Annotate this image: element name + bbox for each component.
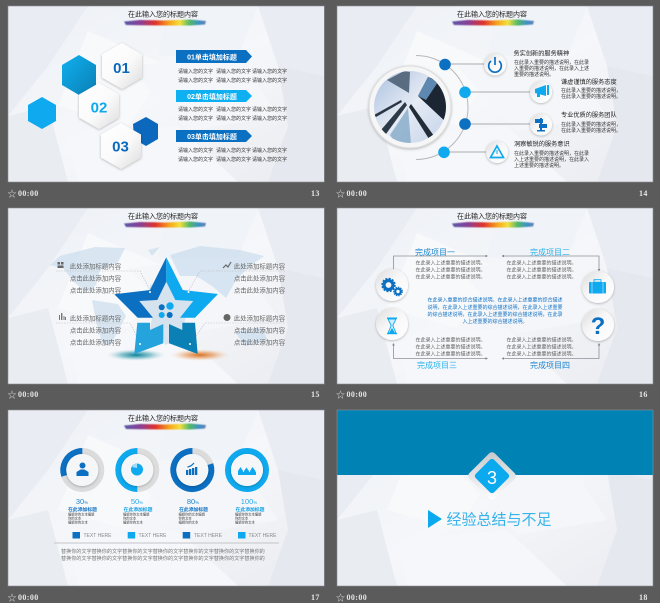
summary text (61, 548, 265, 562)
footer 15: 15 (311, 390, 320, 399)
icon: grid (58, 262, 64, 268)
text block: bottom left: 点击此处添加内容 (70, 338, 122, 346)
description text: top: 在此录入上述重要的描述说明。 (416, 274, 486, 280)
item 01: 请输入您的文字 (252, 68, 287, 75)
text block: bottom right: 点击此处添加内容 (234, 338, 286, 346)
stats column 2: 50% (131, 497, 143, 506)
footer 16: 00:00 (346, 390, 367, 399)
text block 2: 谦虚谨慎的服务态度 (561, 78, 617, 86)
stats column 4: 你的文本 (235, 516, 249, 520)
text block: top left: 此处添加标题内容 (70, 262, 122, 270)
text block: top right: 点击此处添加内容 (234, 274, 286, 282)
hexagon 03 (101, 123, 141, 169)
star shadows (106, 349, 230, 361)
bracket connectors (394, 256, 599, 358)
text block: bottom left: 此处添加标题内容 (70, 314, 122, 322)
text block: top right: 此处添加标题内容 (234, 262, 286, 270)
footer 17: 17 (311, 593, 320, 602)
item 02: 请输入您的文字 (252, 115, 287, 122)
text block: bottom left: 点击此处添加内容 (70, 326, 122, 334)
divider (54, 542, 279, 544)
footer 17: ☆ (8, 593, 17, 603)
world map (50, 246, 268, 346)
item 01: 01单击填加标题 (187, 52, 237, 62)
footer 13: 13 (311, 189, 320, 198)
item 01: 请输入您的文字 (252, 77, 287, 84)
item 01: 请输入您的文字 (178, 77, 213, 84)
legend: TEXT HERE (248, 533, 277, 539)
item 01: 请输入您的文字 (216, 68, 251, 75)
text block: top left (70, 262, 122, 294)
star (114, 257, 218, 354)
legend: TEXT HERE (138, 533, 167, 539)
icon: question mark (582, 309, 614, 341)
stats column 2: 在此添加标题 (124, 506, 153, 513)
text block 4: 入上述重要的描述说明，在此录入 (514, 156, 589, 163)
title: 在此输入您的标题内容 (457, 212, 527, 220)
text block 1: 重要的描述说明。 (514, 71, 554, 78)
photo circle (369, 66, 451, 148)
footer 17 (8, 593, 320, 603)
stats column 3: 80% (187, 497, 199, 506)
footer 13 (8, 189, 320, 199)
text block 4: 在此录入重要的描述说明，在此录 (514, 150, 589, 157)
project headings: 完成项目三 (417, 360, 457, 370)
text block 1: 在此录入重要的描述说明，在此录 (514, 59, 589, 66)
title: 在此输入您的标题内容 (128, 212, 198, 220)
text block 2: 在此录入重要的描述说明， (561, 87, 621, 94)
item 03: 03单击填加标题 (187, 132, 237, 141)
footer 14 (336, 189, 648, 199)
stats column 1: 你的文本 (68, 516, 82, 520)
central blue text: 在此录入重要的综合描述说明。在此录入上述重要的综合描述 (427, 296, 563, 304)
connector dots (438, 59, 471, 158)
footer 18: 18 (639, 593, 648, 602)
item 03: 请输入您的文字 (178, 156, 213, 163)
description text: top: 在此录入上述重要的描述说明。 (416, 266, 486, 274)
footer 18: ☆ (336, 593, 345, 603)
text block 4 (514, 140, 589, 169)
item 03: 请输入您的文字 (216, 147, 251, 154)
project headings (415, 247, 570, 370)
stats column 4: 100% (241, 497, 257, 506)
footer 13: 00:00 (18, 189, 39, 198)
legend: TEXT HERE (84, 533, 112, 539)
connector lines (444, 64, 532, 152)
arc (416, 56, 468, 160)
stats column 1 (68, 497, 97, 524)
brush stroke (124, 222, 206, 228)
diamond badge: 3 (487, 468, 497, 488)
stats column 4 (235, 497, 265, 524)
stats column 2: 编辑你的文本编辑 (123, 512, 150, 516)
icon: trend (223, 262, 231, 268)
footer 16: ☆ (336, 390, 345, 400)
stats column 1: 编辑你的文本 (68, 520, 88, 524)
icon: power (484, 54, 506, 76)
stats column 3: 编辑你的文本编辑 (178, 512, 206, 516)
text block: bottom left (70, 314, 122, 346)
central blue text: 入上述重要的综合描述说明。 (462, 318, 528, 325)
stats column 1: 在此添加标题 (68, 506, 97, 513)
panel: slide 16 four projects (337, 208, 653, 384)
description text: bottom: 在此录入上述重要的描述说明。 (416, 344, 486, 350)
ring 30% (58, 446, 106, 494)
description text: top: 在此录入上述重要的描述说明。 (506, 260, 577, 266)
triangle marker (428, 510, 442, 528)
text block 3 (561, 111, 621, 134)
central blue text (427, 296, 563, 325)
panel: slide 17 progress rings (8, 410, 324, 586)
footer 15: ☆ (8, 390, 17, 400)
text block 4: 上述重要的描述说明。 (514, 162, 564, 169)
item 03: 请输入您的文字 (252, 147, 287, 154)
arrowheads (392, 255, 600, 360)
item 03 (176, 130, 287, 163)
text block: top right (234, 262, 286, 294)
footer 14: 14 (639, 189, 648, 198)
diamond badge (467, 451, 517, 501)
text block: bottom right (234, 314, 286, 346)
footer 14: 00:00 (346, 189, 367, 198)
icon: warning (486, 141, 508, 163)
project headings: 完成项目二 (530, 247, 570, 257)
stats column 3 (178, 497, 208, 524)
brush stroke (452, 222, 534, 228)
panel: slide 14 service circle (337, 6, 653, 182)
item 03: 请输入您的文字 (252, 156, 287, 163)
item 02: 请输入您的文字 (178, 115, 213, 122)
footer 14: ☆ (336, 189, 345, 199)
footer 16 (336, 390, 648, 400)
footer 15: 00:00 (18, 390, 39, 399)
item 02: 请输入您的文字 (216, 115, 251, 122)
description text: top (416, 260, 577, 280)
description text: top: 在此录入上述重要的描述说明。 (506, 274, 577, 280)
stats column 2: 编辑你的文本 (123, 520, 143, 524)
stats column 3: 编辑你的文本 (178, 520, 199, 524)
ring 100% (228, 451, 266, 489)
icon: hourglass (376, 308, 408, 340)
brush stroke (452, 20, 534, 26)
description text: top: 在此录入上述重要的描述说明。 (416, 260, 486, 266)
hexagon 01 (102, 43, 142, 89)
dashed leader lines (56, 271, 285, 345)
description text: top: 在此录入上述重要的描述说明。 (506, 266, 577, 274)
text block: bottom right: 点击此处添加内容 (234, 326, 286, 334)
item 02: 请输入您的文字 (178, 106, 213, 113)
text block 2 (561, 78, 621, 100)
legend: TEXT HERE (194, 533, 223, 539)
footer 18 (336, 593, 648, 603)
footer 15 (8, 390, 320, 400)
icon: bars (59, 313, 66, 320)
item 03: 请输入您的文字 (178, 147, 213, 154)
icon: signpost (530, 114, 552, 136)
stats column 4: 编辑你的文本 (235, 520, 255, 524)
brush stroke (124, 20, 206, 26)
icon: question mark: ? (591, 313, 605, 340)
icon: pie (224, 314, 230, 321)
item 03: 请输入您的文字 (216, 156, 251, 163)
title: 在此输入您的标题内容 (128, 414, 198, 422)
legend (72, 532, 277, 539)
footer 13: ☆ (8, 189, 17, 199)
stats column 3: 你的文本 (178, 516, 192, 520)
icon: megaphone (530, 81, 552, 103)
summary text: 替换你的文字替换你的文字替换你的文字替换你的文字替换你的文字替换你的文字替换你的 (61, 555, 265, 562)
item 02: 02单击填加标题 (187, 92, 237, 101)
item 02: 请输入您的文字 (216, 106, 251, 113)
item 02: 请输入您的文字 (252, 106, 287, 113)
hexagon: dark blue (133, 117, 158, 146)
text block: top left: 点击此处添加内容 (70, 286, 122, 294)
project headings: 完成项目一 (415, 247, 455, 257)
stats column 3: 在此添加标题 (179, 506, 208, 513)
footer 17: 00:00 (18, 593, 39, 602)
blue header band (337, 410, 653, 475)
text block 1: 务实创新的服务精神 (514, 50, 569, 58)
description text: bottom: 在此录入上述重要的描述说明。 (506, 344, 577, 350)
stats column 2 (123, 497, 153, 524)
text block 3: 在此录入重要的描述说明。 (561, 127, 621, 134)
hexagon 02: 02 (91, 100, 107, 116)
stats column 2: 你的文本 (123, 516, 137, 520)
item 02 (176, 90, 287, 122)
text block 4: 洞察敏锐的服务意识 (514, 140, 570, 148)
text block 1 (514, 50, 589, 78)
description text: bottom: 在此录入上述重要的描述说明。 (416, 336, 486, 344)
item 01: 请输入您的文字 (216, 77, 251, 84)
footer 18: 00:00 (346, 593, 367, 602)
panel: slide 13 hexagons (8, 6, 324, 182)
icon: gears (376, 269, 408, 301)
hexagon 03: 03 (112, 138, 129, 156)
stats column 1: 编辑你的文本编辑 (68, 512, 95, 516)
hexagon: large blue (62, 55, 96, 95)
description text: bottom: 在此录入上述重要的描述说明。 (506, 350, 577, 358)
text block 3: 专业优质的服务团队 (561, 111, 617, 119)
stats column 1: 30% (76, 497, 88, 506)
panel: slide 15 star (8, 208, 324, 384)
section heading: 经验总结与不足 (446, 512, 552, 528)
description text: bottom: 在此录入上述重要的描述说明。 (416, 350, 486, 358)
central blue text: 说明，在此录入上述重要的综合描述说明，在此录入上述重要 (427, 304, 563, 311)
stats column 4: 在此添加标题 (236, 506, 265, 513)
text block 3: 在此录入重要的描述说明， (561, 121, 621, 128)
panel: slide 18 section divider (337, 410, 653, 586)
title: 在此输入您的标题内容 (457, 10, 527, 18)
footer 16: 16 (639, 390, 648, 399)
summary text: 替换你的文字替换你的文字替换你的文字替换你的文字替换你的文字替换你的文字替换你的 (61, 548, 265, 555)
ring 80% (168, 446, 216, 494)
hexagon 02 (79, 83, 119, 129)
hexagon 01: 01 (113, 60, 130, 77)
description text: bottom (416, 336, 577, 358)
ring 50% (118, 451, 156, 489)
hexagon: light blue (28, 97, 56, 129)
stats column 4: 编辑你的文本编辑 (235, 512, 262, 516)
title: 在此输入您的标题内容 (128, 10, 198, 18)
item 01 (176, 50, 287, 84)
text block: bottom right: 此处添加标题内容 (234, 314, 286, 322)
icon: briefcase (582, 271, 614, 303)
brush stroke (124, 424, 206, 430)
central blue text: 的综合描述说明，在此录入上述重要的综合描述说明，在此录 (427, 311, 563, 318)
project headings: 完成项目四 (530, 360, 570, 370)
text block: top right: 点击此处添加内容 (234, 286, 286, 294)
text block: top left: 点击此处添加内容 (70, 274, 122, 282)
description text: bottom: 在此录入上述重要的描述说明。 (506, 336, 577, 344)
text block 1: 入重要的描述说明，在此录入上述 (514, 65, 589, 72)
item 01: 请输入您的文字 (178, 68, 213, 75)
text block 2: 在此录入重要的描述说明。 (561, 93, 621, 100)
